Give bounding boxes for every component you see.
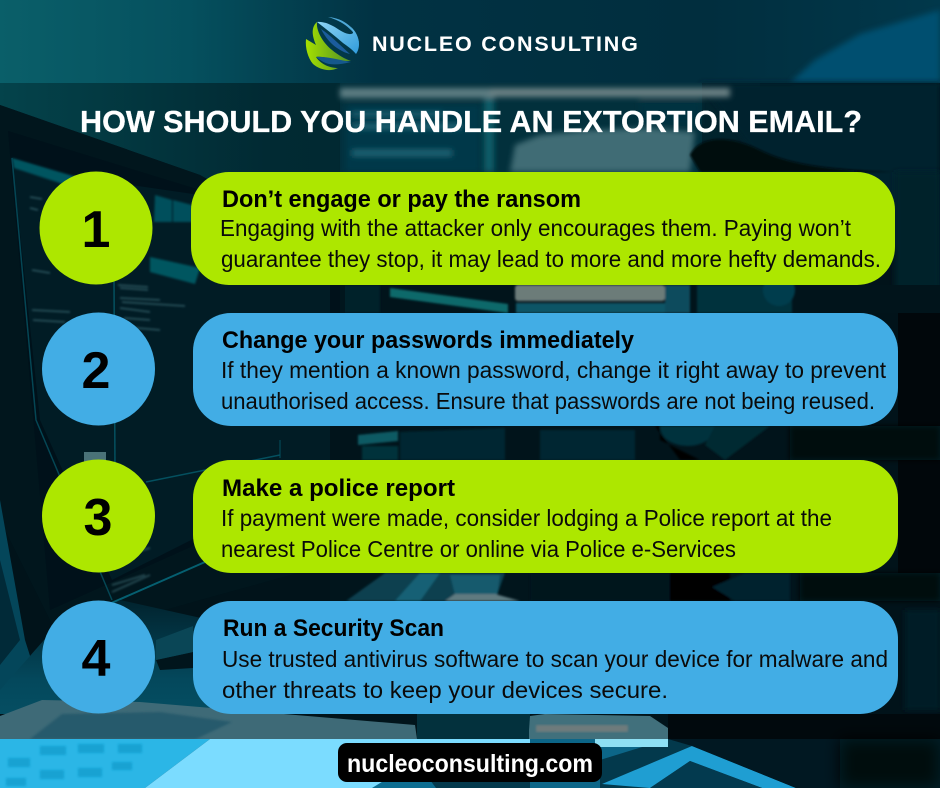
hand silhouette [690, 139, 895, 172]
step 4 card: Use trusted antivirus software to scan your device for malware and [222, 646, 888, 672]
step 4 number badge: 4 [82, 630, 111, 688]
desk below card four [200, 714, 940, 739]
website footer badge: nucleoconsulting.com [347, 750, 593, 778]
logo wordmark: NUCLEO CONSULTING [372, 32, 639, 56]
gap below card one [330, 285, 940, 313]
centre monitor [340, 83, 702, 188]
step 3 card: If payment were made, consider lodging a Police report at the [221, 505, 832, 531]
website footer badge [338, 743, 602, 782]
step 2 card: If they mention a known password, change it right away to prevent [221, 357, 887, 383]
step 3 number badge [42, 460, 155, 572]
step 3 card [193, 460, 898, 573]
gap below card three: keyboard [330, 573, 940, 601]
step 2 card [193, 313, 898, 426]
logo [306, 17, 639, 70]
title: HOW SHOULD YOU HANDLE AN EXTORTION EMAIL? [80, 104, 862, 139]
top band [0, 0, 940, 83]
small screen device [529, 714, 668, 739]
step 3 card: Make a police report [222, 475, 455, 502]
upper wall behind the title [0, 83, 760, 260]
step 2 number badge: 2 [82, 342, 110, 400]
step 1 number badge [40, 172, 152, 284]
left monitor [0, 105, 345, 640]
step 1 card: Engaging with the attacker only encourages them. Paying won’t [220, 215, 852, 241]
step 3 number badge: 3 [84, 489, 112, 547]
step 4 card: Run a Security Scan [223, 615, 444, 642]
step 2 card: Change your passwords immediately [222, 327, 635, 354]
lower-left laptop [0, 700, 417, 739]
step 1 card: Don’t engage or pay the ransom [222, 186, 581, 213]
step 1 card [191, 172, 895, 285]
step 3 card: nearest Police Centre or online via Police e-Services [221, 536, 736, 562]
gap below card two [330, 426, 940, 460]
step 4 number badge [42, 600, 155, 714]
step 2 number badge [42, 312, 155, 426]
step 4 card: other threats to keep your devices secure. [222, 677, 668, 703]
step 4 card [193, 601, 898, 714]
step 2 card: unauthorised access. Ensure that passwords are not being reused. [221, 388, 875, 414]
right dark figure [700, 83, 940, 300]
left screen [12, 158, 330, 580]
step 1 number badge: 1 [82, 201, 110, 259]
step 1 card: guarantee they stop, it may lead to more and more hefty demands. [221, 246, 881, 272]
lower left corner monitor edge and desk [0, 500, 44, 700]
bottom band [0, 739, 940, 788]
icon: nucleo globe [306, 17, 359, 70]
